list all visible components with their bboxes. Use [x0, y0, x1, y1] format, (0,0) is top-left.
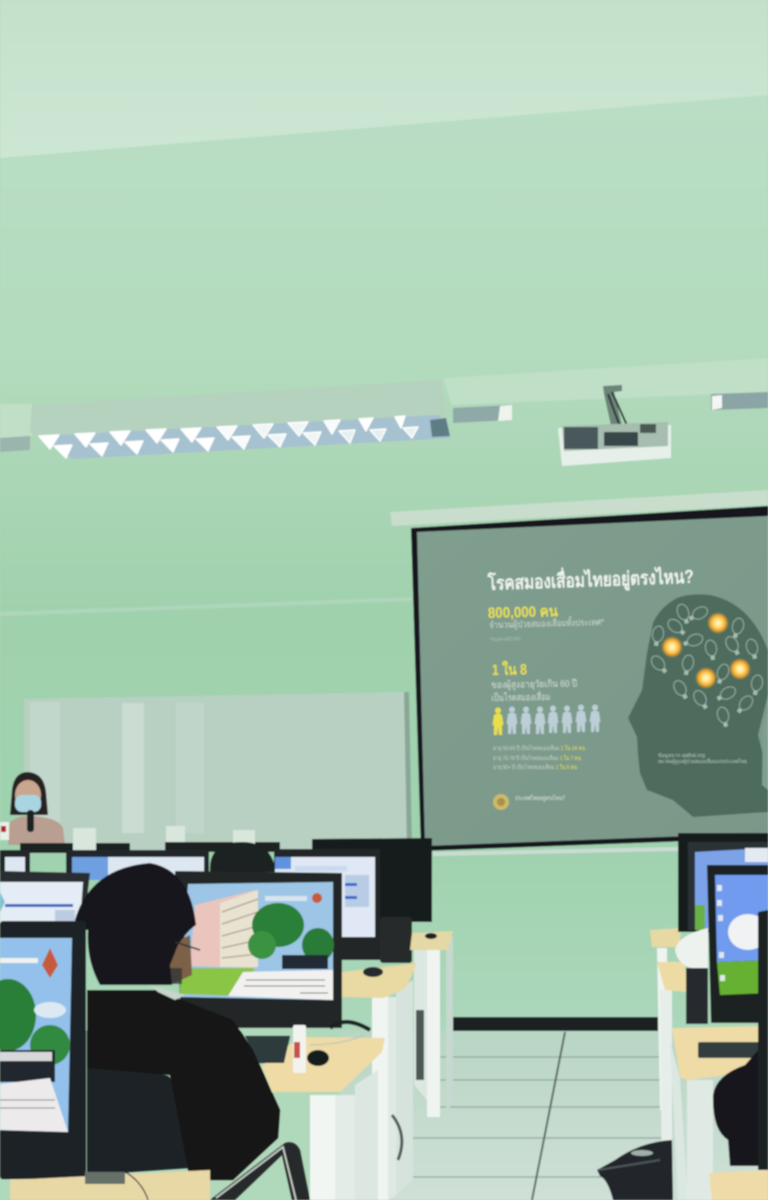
- desk row 3, left: [410, 931, 453, 1117]
- stat: 800,000: 800,000 คน: [488, 603, 559, 622]
- chair back: [87, 1068, 190, 1175]
- stat: 800,000: [488, 602, 605, 643]
- projector: [558, 385, 671, 466]
- stat: 1 in 8: เป็นโรคสมองเสื่อม: [491, 690, 550, 704]
- wall dado line: [0, 597, 412, 616]
- slide source note: [658, 752, 747, 765]
- right keyboard: [698, 1042, 762, 1058]
- black computer box: [686, 968, 708, 1024]
- age breakdown text: อายุ 80+ ปี เป็นโรคสมองเสื่อม 1 ใน 5 คน: [493, 763, 577, 771]
- slide logo: ประเทศไทยอยู่ตรงไหน?: [515, 794, 566, 802]
- right desk, far: [650, 928, 681, 1117]
- slide title: โรคสมองเสื่อมไทยอยู่ตรงไหน?: [486, 563, 694, 596]
- age breakdown text: [493, 744, 585, 771]
- right rear monitor: [678, 833, 768, 932]
- backpack on floor: [597, 1140, 673, 1200]
- age breakdown text: อายุ 70-79 ปี เป็นโรคสมองเสื่อม 1 ใน 7 คน: [493, 754, 581, 762]
- left middle monitor: [0, 871, 90, 925]
- student at right edge: [713, 1048, 760, 1166]
- chair arm: [210, 1142, 310, 1200]
- nearest monitor edge: [758, 910, 768, 1170]
- teacher: [0, 772, 65, 845]
- projection screen casing: [390, 490, 768, 526]
- ceiling: [0, 0, 768, 158]
- center monitor: [175, 871, 342, 1028]
- student in black jacket: [75, 863, 280, 1180]
- stat: 1 in 8: 1 ใน 8: [492, 660, 527, 679]
- baseboard: [453, 1017, 658, 1031]
- front left desk: [10, 1165, 210, 1200]
- back wall: [0, 90, 768, 1030]
- right desk, middle: [657, 962, 687, 1200]
- age breakdown text: อายุ 60-69 ปี เป็นโรคสมองเสื่อม 1 ใน 14 คน: [493, 744, 585, 752]
- slide source note: ข้อมูลจาก aathai.org: [658, 752, 705, 759]
- ceiling light fixture: [30, 380, 451, 459]
- glowing bulbs: [661, 612, 751, 689]
- projection screen: [411, 506, 768, 856]
- whiteboard: [24, 692, 412, 850]
- slide logo: [493, 794, 566, 810]
- floor: [340, 1031, 768, 1200]
- middle row monitor, left: [0, 850, 209, 880]
- stat: 800,000: *ข้อมูลล่าสุดปี 2563: [489, 635, 521, 643]
- stat: 800,000: จำนวนผู้ป่วยสมองเสื่อมทั้งประเทศ*: [489, 615, 605, 631]
- front left monitor: [0, 921, 86, 1179]
- white cloth: [675, 928, 708, 968]
- desk row 2, left: [342, 963, 417, 1200]
- front right desk: [709, 1170, 768, 1200]
- person in back row, head: [210, 842, 276, 872]
- paper signs on monitors: [73, 826, 746, 862]
- right leg supports, near desk: [670, 1040, 713, 1200]
- head silhouette: [628, 594, 768, 817]
- small ceiling lights: [0, 392, 768, 452]
- brain bulbs: [649, 603, 764, 728]
- stat: 1 in 8: ของผู้สูงอายุวัยเกิน 60 ปี: [491, 677, 577, 691]
- elderly people icons: [492, 704, 600, 735]
- right near desk top: [672, 1026, 762, 1080]
- ceiling beam: [0, 358, 768, 438]
- back row monitors: [20, 838, 432, 922]
- slide source note: สมาคมผู้ดูแลผู้ป่วยสมองเสื่อมแห่งประเทศไทย: [658, 758, 747, 765]
- desk row 1, left: [262, 1037, 385, 1200]
- keyboard, mouse and bottle on desk: [245, 1022, 370, 1073]
- right front monitor: [707, 865, 768, 1023]
- stat: 1 in 8: [491, 660, 577, 704]
- middle row monitor, right: [274, 849, 412, 963]
